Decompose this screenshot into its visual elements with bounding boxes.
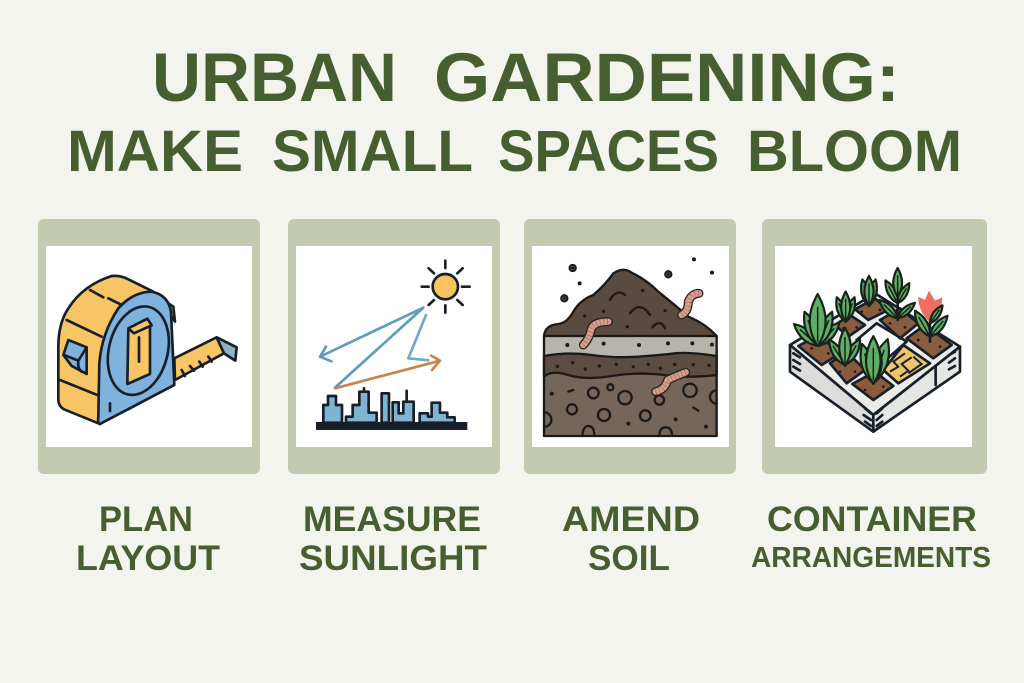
- label: measure sunlight: [299, 500, 487, 578]
- city skyline: [316, 388, 467, 430]
- label: plan layout: LAYOUT: [76, 539, 220, 578]
- title: [67, 39, 962, 184]
- sunlight arrows: [320, 308, 440, 388]
- title: MAKE: [67, 119, 243, 184]
- label: measure sunlight: SUNLIGHT: [299, 539, 487, 578]
- panel: container arrangements: [762, 219, 987, 474]
- panel: measure sunlight: [288, 219, 500, 474]
- label: container arrangements: [751, 500, 991, 574]
- label: amend soil: [562, 500, 700, 578]
- sun: [422, 261, 470, 313]
- icon: tape measure: [58, 276, 237, 424]
- earthworms: [583, 293, 699, 392]
- icon: soil cross-section: [544, 257, 717, 436]
- icon: sun and city: [316, 261, 470, 430]
- soil cells: [798, 298, 952, 400]
- panel: amend soil: [524, 219, 736, 474]
- title: GARDENING:: [434, 39, 900, 116]
- label: plan layout: [76, 500, 220, 578]
- label: container arrangements: CONTAINER: [767, 500, 977, 539]
- planter box: [790, 293, 960, 432]
- title: SMALL: [272, 119, 473, 184]
- label: amend soil: SOIL: [588, 539, 670, 578]
- label: plan layout: PLAN: [99, 500, 193, 539]
- label: container arrangements: ARRANGEMENTS: [751, 542, 991, 574]
- title: SPACES: [498, 119, 719, 184]
- label: amend soil: AMEND: [562, 500, 700, 539]
- title: BLOOM: [747, 119, 962, 184]
- title: URBAN: [152, 39, 397, 116]
- panel: plan layout: [38, 219, 260, 474]
- icon: container garden: [790, 268, 960, 432]
- plants: [791, 268, 951, 386]
- label: measure sunlight: MEASURE: [303, 500, 481, 539]
